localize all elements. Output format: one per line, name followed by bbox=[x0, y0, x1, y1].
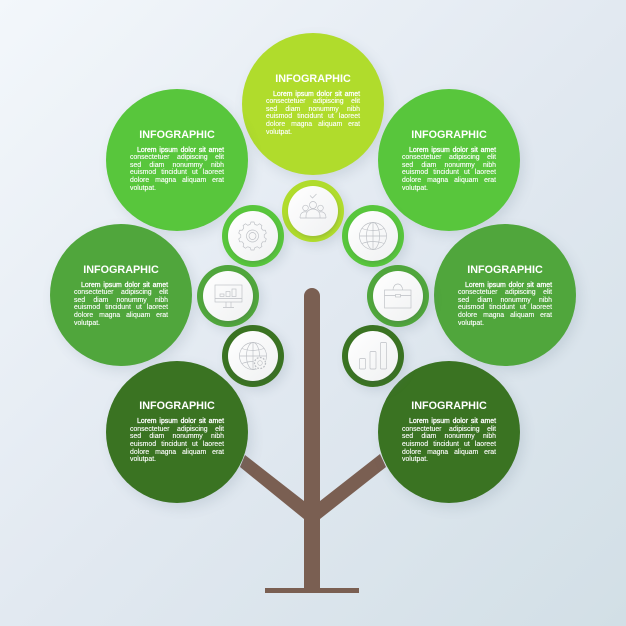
text block bbox=[402, 146, 496, 192]
icon: globe with gear bbox=[222, 325, 284, 387]
text block: Lorem ipsum dolor sit amet bbox=[137, 146, 224, 154]
panel: middle right circle bbox=[434, 224, 576, 366]
text block: Lorem ipsum dolor sit amet bbox=[465, 282, 552, 288]
panel: upper left circle bbox=[106, 89, 248, 231]
text block bbox=[74, 281, 168, 327]
text block: volutpat. bbox=[458, 320, 484, 327]
text block: euismod tincidunt ut laoreet bbox=[130, 169, 224, 176]
icon: bar chart bbox=[342, 325, 404, 387]
text block: Lorem ipsum dolor sit amet bbox=[137, 418, 224, 425]
heading: INFOGRAPHIC bbox=[411, 400, 487, 412]
text block: sed diam nonummy nibh bbox=[458, 297, 552, 304]
text block: consectetuer adipiscing elit bbox=[130, 426, 224, 433]
icon: team with check bbox=[282, 180, 344, 242]
text block: dolore magna aliquam erat bbox=[402, 177, 496, 184]
text block: consectetuer adipiscing elit bbox=[266, 98, 360, 105]
text block: euismod tincidunt ut laoreet bbox=[458, 304, 552, 311]
text block: sed diam nonummy nibh bbox=[402, 162, 496, 169]
text block: sed diam nonummy nibh bbox=[130, 433, 224, 440]
text block: consectetuer adipiscing elit bbox=[402, 426, 496, 433]
panel: lower left circle bbox=[106, 360, 248, 502]
heading: INFOGRAPHIC bbox=[83, 264, 159, 276]
text block bbox=[130, 146, 224, 192]
text block: Lorem ipsum dolor sit amet bbox=[273, 90, 360, 98]
icon: gear bbox=[222, 205, 284, 267]
text block: volutpat. bbox=[130, 185, 156, 192]
heading: INFOGRAPHIC bbox=[411, 128, 487, 140]
text block: volutpat. bbox=[130, 456, 156, 463]
text block: sed diam nonummy nibh bbox=[402, 433, 496, 440]
text block bbox=[458, 281, 552, 327]
heading: INFOGRAPHIC bbox=[139, 400, 215, 412]
text block: consectetuer adipiscing elit bbox=[74, 289, 168, 296]
text block: volutpat. bbox=[402, 185, 428, 192]
text block: sed diam nonummy nibh bbox=[74, 297, 168, 304]
text block: euismod tincidunt ut laoreet bbox=[74, 304, 168, 311]
text block: volutpat. bbox=[74, 320, 100, 327]
text block: volutpat. bbox=[402, 456, 428, 463]
text block: sed diam nonummy nibh bbox=[266, 106, 360, 113]
text block: consectetuer adipiscing elit bbox=[130, 154, 224, 161]
text block: Lorem ipsum dolor sit amet bbox=[409, 418, 496, 425]
heading: INFOGRAPHIC bbox=[467, 264, 543, 276]
text block: euismod tincidunt ut laoreet bbox=[402, 169, 496, 176]
text block: Lorem ipsum dolor sit amet bbox=[81, 282, 168, 288]
text block: dolore magna aliquam erat bbox=[74, 312, 168, 319]
icon: briefcase bbox=[367, 265, 429, 327]
heading: INFOGRAPHIC bbox=[275, 72, 351, 84]
panel: top circle bbox=[242, 33, 384, 175]
text block: Lorem ipsum dolor sit amet bbox=[409, 146, 496, 154]
text block: dolore magna aliquam erat bbox=[266, 121, 360, 128]
text block: consectetuer adipiscing elit bbox=[458, 289, 552, 296]
panel: middle left circle bbox=[50, 224, 192, 366]
text block: euismod tincidunt ut laoreet bbox=[266, 113, 360, 120]
text block: dolore magna aliquam erat bbox=[130, 449, 224, 456]
text block bbox=[266, 90, 360, 136]
heading: INFOGRAPHIC bbox=[139, 128, 215, 140]
text block: euismod tincidunt ut laoreet bbox=[130, 441, 224, 448]
text block: dolore magna aliquam erat bbox=[402, 449, 496, 456]
text block: dolore magna aliquam erat bbox=[130, 177, 224, 184]
icon: globe bbox=[342, 205, 404, 267]
text block: volutpat. bbox=[266, 129, 292, 136]
panel: lower right circle bbox=[378, 360, 520, 502]
text block: dolore magna aliquam erat bbox=[458, 312, 552, 319]
text block bbox=[130, 417, 224, 463]
text block: euismod tincidunt ut laoreet bbox=[402, 441, 496, 448]
text block: sed diam nonummy nibh bbox=[130, 162, 224, 169]
panel: upper right circle bbox=[378, 89, 520, 231]
icon: monitor with chart bbox=[197, 265, 259, 327]
text block: consectetuer adipiscing elit bbox=[402, 154, 496, 161]
text block bbox=[402, 417, 496, 463]
